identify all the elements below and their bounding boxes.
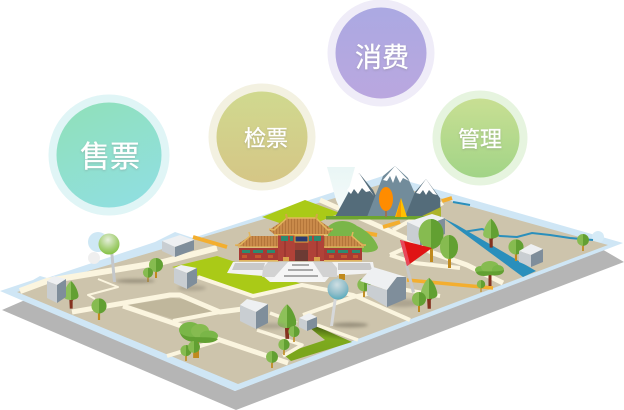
building: centre house [240, 299, 286, 329]
building: large house [360, 267, 420, 307]
left wing [235, 232, 279, 262]
platforms [227, 262, 375, 282]
mountains [326, 166, 441, 220]
building: small box [299, 313, 317, 331]
light beam behind mountains [327, 167, 355, 214]
building: top box [162, 235, 194, 257]
green areas [128, 200, 352, 361]
bubble: 消费: 消费 [355, 43, 409, 73]
building: house 2 [174, 265, 206, 291]
bush behind palace [327, 221, 378, 252]
bubble: 售票: 售票 [80, 141, 140, 174]
building: left house [47, 276, 66, 303]
map border [0, 175, 623, 391]
bush tree: lower left [179, 322, 218, 361]
map base shadow [2, 248, 624, 410]
roads [20, 200, 503, 363]
bubble: 消费 [328, 0, 434, 106]
pin: green [88, 232, 155, 283]
orange paths [193, 198, 493, 288]
river [443, 202, 593, 277]
snow caps [347, 166, 437, 196]
bubble: 管理: 管理 [458, 127, 502, 152]
trees near the flag [412, 278, 437, 312]
building: right box [519, 244, 543, 267]
bubble: 检票: 检票 [244, 126, 288, 151]
map board [0, 175, 623, 391]
big trees by the flag [418, 219, 458, 268]
right wing [324, 232, 366, 262]
palace [227, 214, 378, 282]
bubble: 管理 [432, 90, 528, 186]
back box building [407, 214, 445, 246]
pin: blue [328, 274, 368, 328]
bubble: 售票 [48, 94, 170, 216]
red flag [400, 240, 432, 293]
bush tree: right [475, 261, 504, 286]
main hall [269, 214, 333, 261]
bubble: 检票 [208, 84, 316, 190]
map ground [17, 183, 608, 384]
trees [64, 219, 589, 368]
